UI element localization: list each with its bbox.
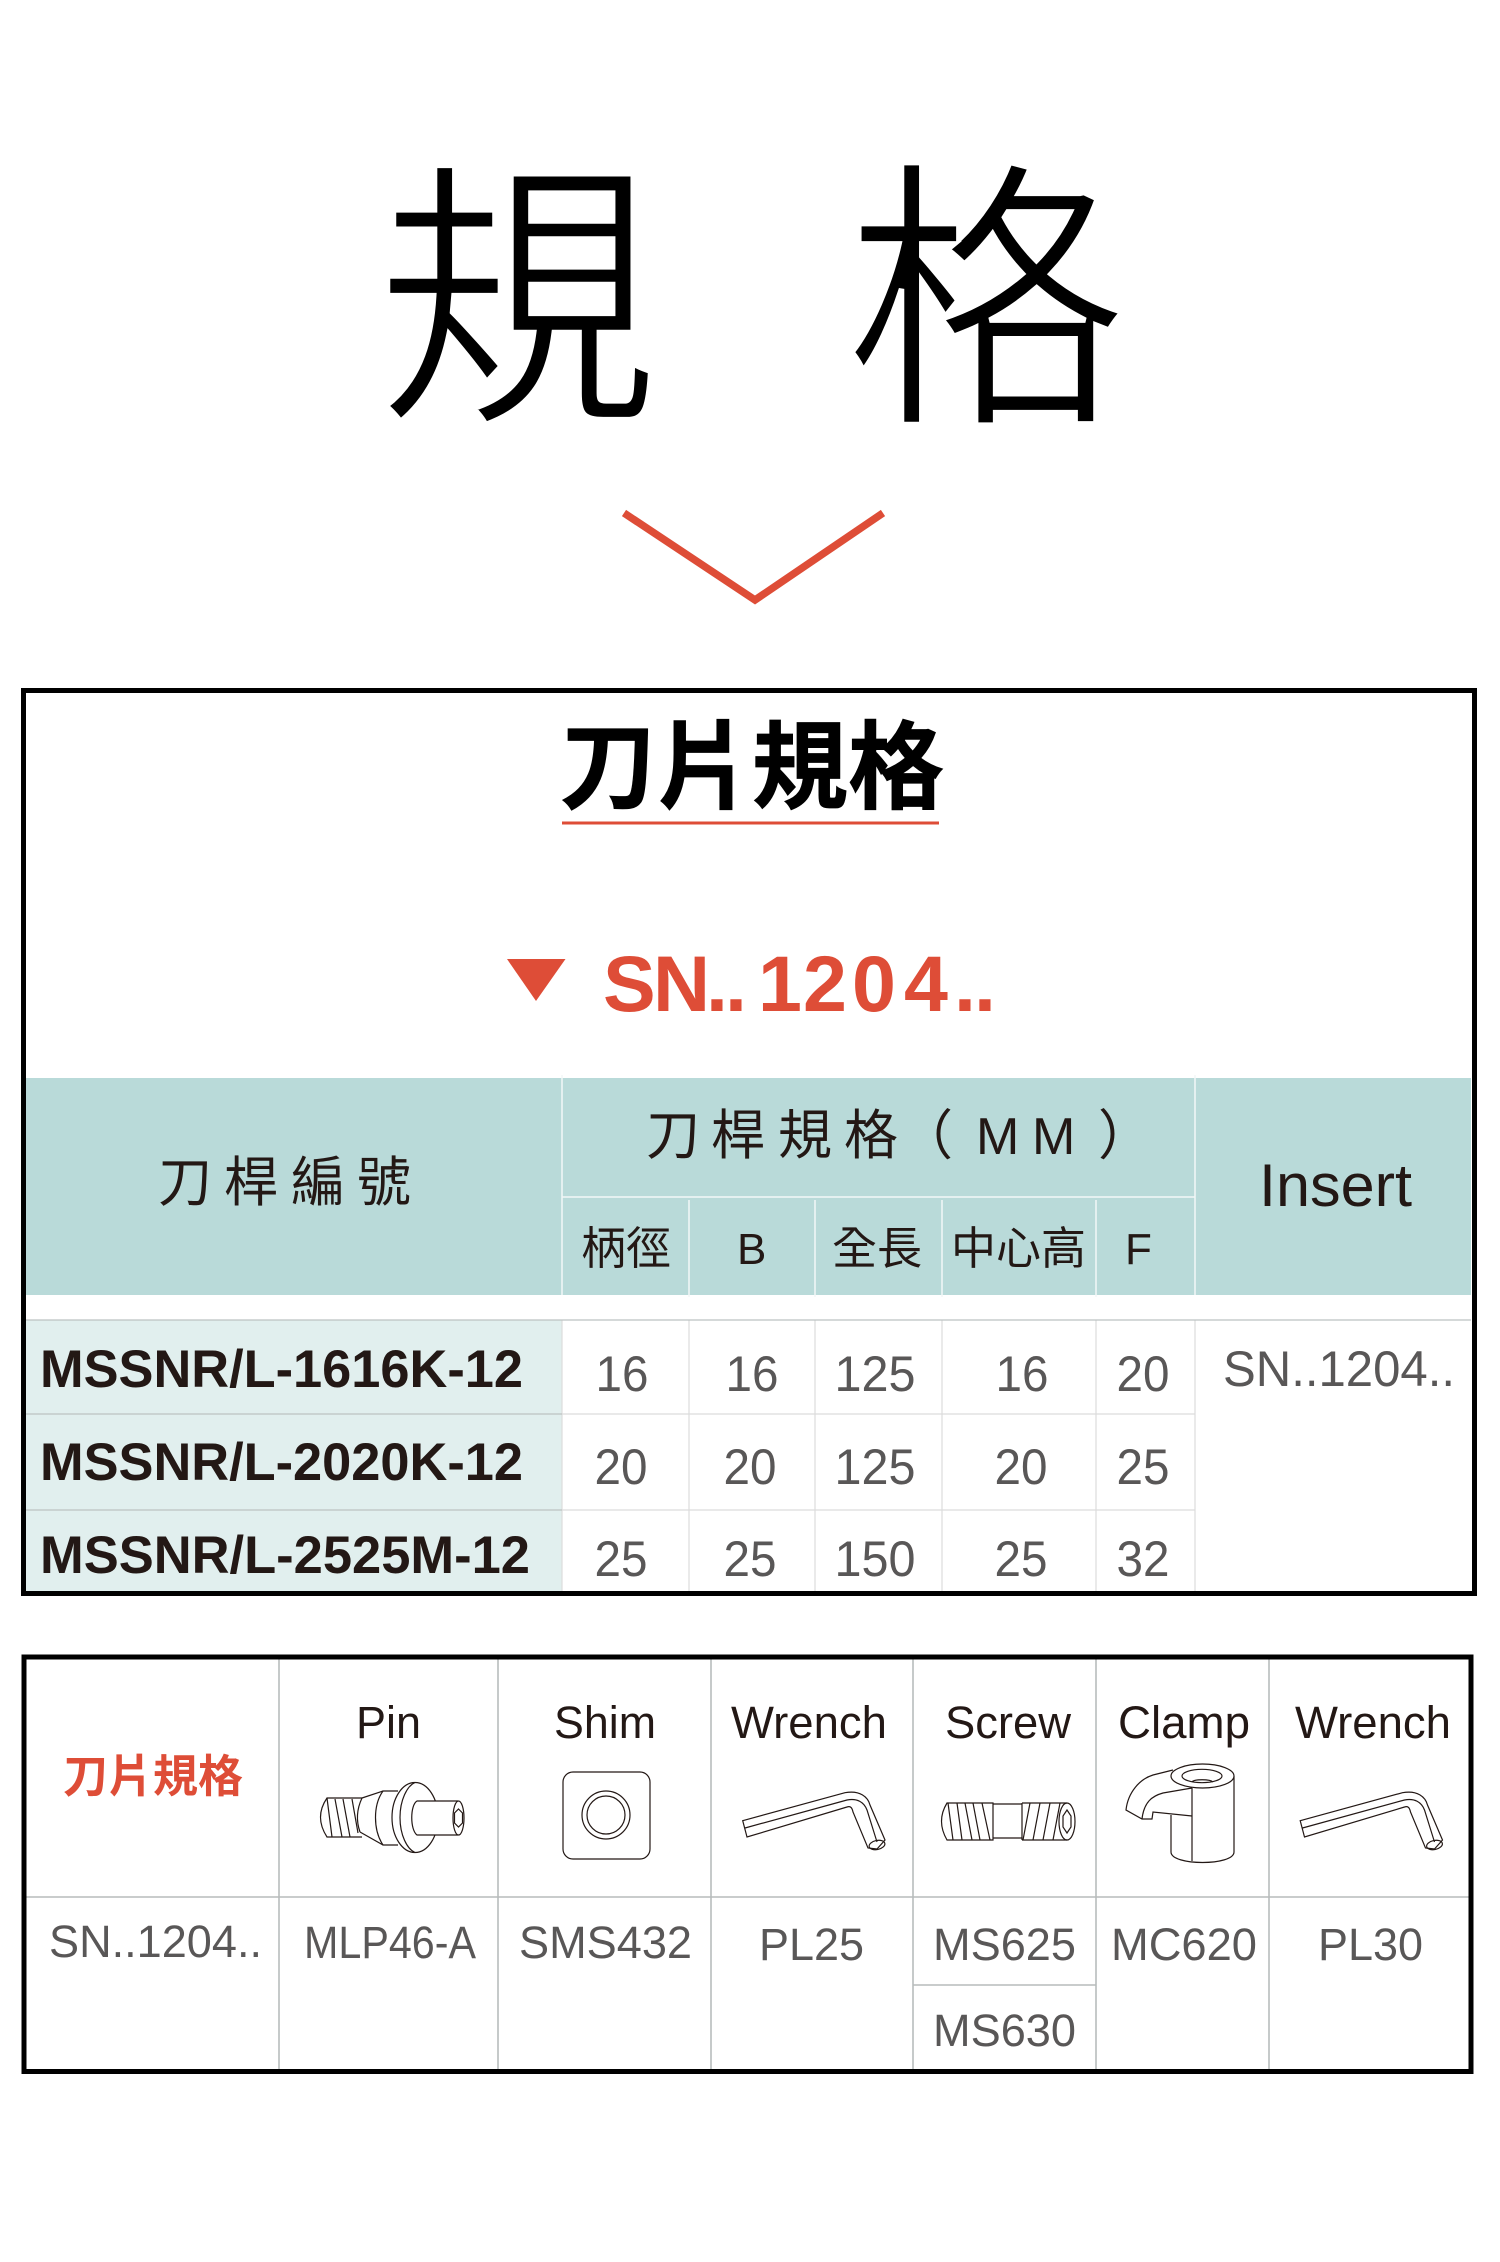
column heads: Pin xyxy=(356,1697,421,1748)
table header background xyxy=(26,1078,1471,1295)
header: holder dimensions xyxy=(646,1106,1152,1166)
column heads: Shim xyxy=(554,1697,656,1748)
header: holder number: 刀桿編號 xyxy=(158,1153,411,1213)
dimension values: 16 xyxy=(596,1346,648,1402)
sub headers: F xyxy=(1125,1225,1152,1274)
dimension values: 125 xyxy=(834,1439,916,1495)
header: holder dimensions: 刀桿規格 xyxy=(646,1106,898,1166)
insert value: SN..1204.. xyxy=(1223,1341,1455,1397)
part numbers: MLP46-A xyxy=(304,1917,476,1968)
title xyxy=(375,145,1129,463)
title: 規 xyxy=(375,145,660,463)
dimension values: 16 xyxy=(726,1346,778,1402)
holder model names: MSSNR/L-1616K-12 xyxy=(40,1340,523,1399)
sub headers: 中心高 xyxy=(951,1223,1086,1274)
holder model names: MSSNR/L-2525M-12 xyxy=(40,1526,530,1585)
dimension values: 20 xyxy=(1116,1346,1170,1402)
dimension values: 20 xyxy=(594,1439,648,1495)
part numbers: MC620 xyxy=(1111,1919,1257,1970)
dimension values xyxy=(594,1346,1170,1587)
icon: clamp xyxy=(1126,1764,1234,1862)
sub headers: 柄徑 xyxy=(581,1223,671,1274)
dimension values: 25 xyxy=(594,1531,648,1587)
holder model names: MSSNR/L-2020K-12 xyxy=(40,1433,523,1492)
sub headers: B xyxy=(737,1225,766,1274)
part numbers xyxy=(49,1916,1423,2056)
heading: insert specification: 刀片規格 xyxy=(560,715,944,822)
header: holder dimensions: （ xyxy=(899,1106,953,1166)
dimension values: 25 xyxy=(724,1531,776,1587)
icon: shim xyxy=(563,1772,650,1859)
header: holder dimensions: MM xyxy=(976,1108,1075,1166)
column heads: Screw xyxy=(945,1697,1071,1748)
column heads: Clamp xyxy=(1118,1697,1250,1748)
arrow: chevron down xyxy=(624,513,883,600)
header: insert: Insert xyxy=(1259,1152,1412,1219)
part numbers: MS625 xyxy=(933,1919,1076,1970)
dimension values: 32 xyxy=(1116,1531,1170,1587)
title: 格 xyxy=(844,145,1129,463)
icon: screw xyxy=(942,1803,1075,1840)
dimension values: 20 xyxy=(994,1439,1048,1495)
icon: red triangle xyxy=(507,959,566,1001)
dimension values: 25 xyxy=(1116,1439,1170,1495)
sub headers: 全長 xyxy=(832,1223,922,1274)
panel: holder specification table xyxy=(24,690,1474,1594)
dimension values: 16 xyxy=(996,1346,1048,1402)
icon: wrench 2 xyxy=(1300,1792,1443,1851)
panel: accessories table xyxy=(24,1657,1471,2072)
dimension values: 150 xyxy=(834,1531,916,1587)
table frame xyxy=(24,690,1474,1594)
part numbers: SN..1204.. xyxy=(49,1916,262,1967)
dimension values: 25 xyxy=(994,1531,1048,1587)
holder model names xyxy=(40,1340,530,1585)
sub headers xyxy=(581,1223,1152,1274)
part numbers: PL30 xyxy=(1318,1919,1423,1970)
first column shading xyxy=(26,1320,562,1591)
icon: wrench xyxy=(743,1792,886,1851)
insert code heading: SN..1204.. xyxy=(603,939,996,1028)
dimension values: 125 xyxy=(834,1346,916,1402)
red label: 刀片規格 xyxy=(63,1751,243,1802)
part numbers: PL25 xyxy=(759,1919,864,1970)
heading underline xyxy=(562,822,939,824)
dimension values: 20 xyxy=(724,1439,776,1495)
icon: pin xyxy=(320,1782,464,1852)
accessories frame xyxy=(24,1657,1471,2072)
part numbers: MS630 xyxy=(933,2005,1076,2056)
part numbers: SMS432 xyxy=(519,1917,692,1968)
column heads: Wrench xyxy=(731,1697,887,1748)
header: holder dimensions: ） xyxy=(1098,1106,1152,1166)
column heads: Wrench xyxy=(1295,1697,1451,1748)
column heads xyxy=(356,1697,1451,1748)
